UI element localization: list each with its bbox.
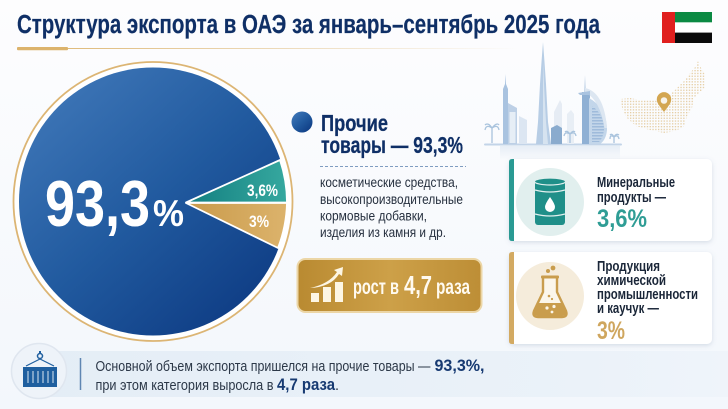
icon: location pin bbox=[657, 92, 671, 112]
pie label: 93,3%: 93,3 bbox=[45, 167, 150, 240]
illustration: Dubai skyline bbox=[484, 42, 622, 160]
summary text: при этом категория выросла в bbox=[96, 378, 274, 394]
summary text: Основной объем экспорта пришелся на прочие товары — bbox=[96, 359, 431, 375]
growth text: раза bbox=[436, 276, 470, 299]
callout: growth badge bbox=[298, 259, 482, 312]
panel: mineral products bbox=[509, 159, 712, 241]
panel: chemical products and rubber bbox=[509, 252, 712, 345]
card value: 3,6% bbox=[597, 205, 647, 233]
title: Структура экспорта в ОАЭ за январь–сентябрь 2025 года bbox=[17, 11, 601, 39]
legend description: косметические средства, bbox=[320, 174, 458, 190]
pie label: percent sign: % bbox=[153, 193, 184, 234]
legend heading: товары — 93,3% bbox=[321, 132, 463, 158]
card text: и каучук — bbox=[597, 301, 659, 317]
icon: cargo container on hook bbox=[12, 344, 66, 398]
pie label: 3%: 3% bbox=[249, 212, 269, 231]
summary text: . bbox=[335, 378, 339, 394]
legend heading: Прочие bbox=[321, 110, 388, 136]
panel: summary band bbox=[12, 344, 728, 398]
legend description: кормовые добавки, bbox=[320, 208, 427, 224]
chart: pie of export structure bbox=[14, 62, 292, 341]
summary text: 4,7 раза bbox=[277, 376, 336, 394]
icon: growth bars and arrow bbox=[310, 267, 343, 302]
icon: oil barrel bbox=[516, 168, 584, 236]
slice: other goods 93.3% bbox=[19, 68, 287, 336]
growth text: рост в bbox=[353, 276, 399, 299]
legend dot bbox=[292, 112, 312, 132]
card text: химической bbox=[597, 273, 666, 289]
card value: 3% bbox=[597, 317, 625, 345]
slice: mineral products 3.6% bbox=[186, 160, 287, 202]
icon: chemical flask bbox=[516, 262, 584, 330]
legend description: высокопроизводительные bbox=[320, 191, 463, 207]
card text: Продукция bbox=[597, 259, 660, 275]
pie label: 3,6%: 3,6% bbox=[247, 181, 278, 200]
title underline bbox=[17, 47, 518, 50]
card text: продукты — bbox=[597, 190, 666, 206]
illustration: dotted UAE map with pin bbox=[621, 61, 705, 133]
card text: Минеральные bbox=[597, 175, 675, 191]
legend description: изделия из камня и др. bbox=[320, 224, 446, 240]
icon: UAE flag bbox=[662, 12, 712, 43]
growth text: 4,7 bbox=[404, 270, 432, 300]
legend: other goods bbox=[292, 110, 466, 240]
slice: chemical products 3% bbox=[186, 203, 287, 248]
card text: промышленности bbox=[597, 287, 698, 303]
summary text: 93,3%, bbox=[434, 357, 484, 375]
